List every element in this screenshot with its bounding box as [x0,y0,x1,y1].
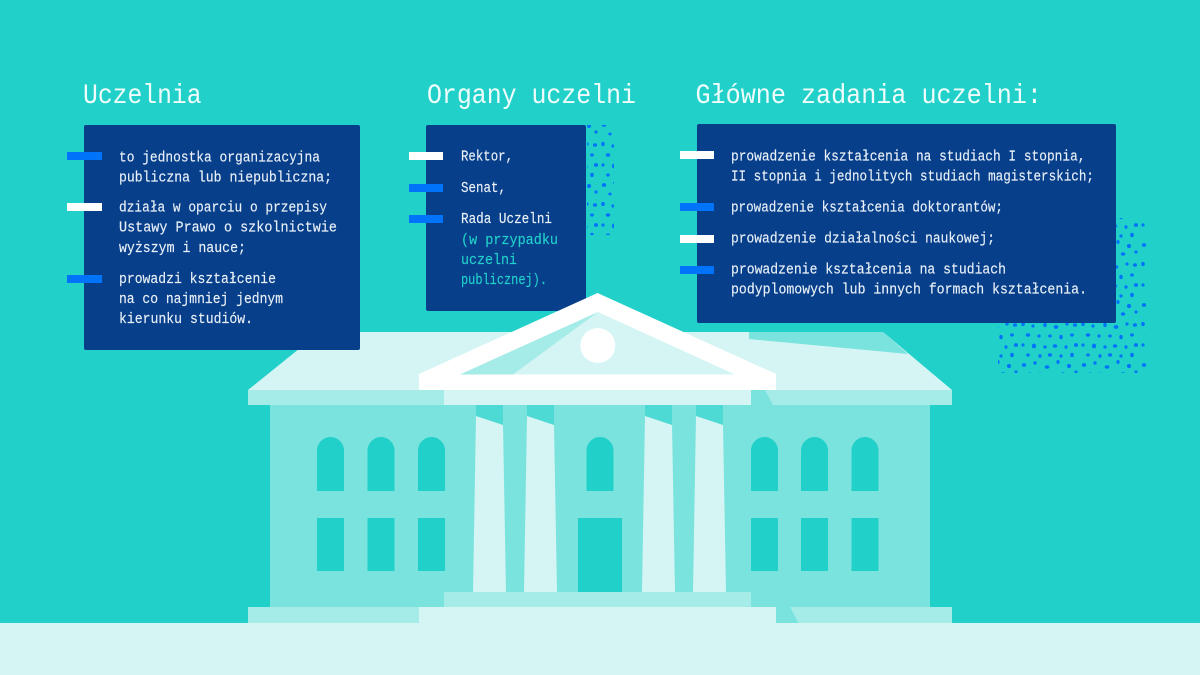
roof shadow [749,332,908,354]
steps [248,592,952,623]
building [248,332,952,623]
heading: Uczelnia: Uczelnia [83,81,202,112]
list text: Senat, [461,180,506,197]
list text [461,149,558,289]
panel: Organy uczelni [426,125,586,311]
list text: wyższym i nauce; [119,240,246,257]
pediment circle [580,328,615,363]
building walls [270,405,930,607]
roof [248,332,952,390]
list text: działa w oparciu o przepisy [119,200,327,217]
bullet markers [67,152,102,283]
panel: Uczelnia [84,125,360,350]
list text [731,148,1094,298]
list text: prowadzi kształcenie [119,271,276,288]
panel: Główne zadania uczelni [697,124,1116,323]
heading: Główne zadania uczelni: Główne zadania uczelni: [696,81,1042,112]
bullet markers [680,151,714,274]
column shadows [476,405,723,427]
column 3: Główne zadania uczelni [680,81,1116,323]
rectangular windows [317,518,878,571]
list text: publiczna lub niepubliczna; [119,170,332,186]
bullet markers [409,152,443,223]
list text: II stopnia i jednolitych studiach magisterskich; [731,168,1094,186]
pediment inner [460,312,735,374]
cornice [248,390,952,405]
list text: prowadzenie działalności naukowej; [731,230,995,248]
arched windows [317,437,878,491]
dot texture: right panel [998,218,1146,373]
list text: (w przypadku [461,232,558,249]
door [578,518,622,592]
columns [473,416,726,592]
dot texture: middle panel [587,125,614,235]
list text: Rektor, [461,149,513,166]
list text: na co najmniej jednym [119,291,283,308]
list text: publicznej). [461,272,547,289]
list text: Ustawy Prawo o szkolnictwie [119,220,337,237]
pediment shade [460,312,598,374]
list text [119,150,337,328]
list text: prowadzenie kształcenia doktorantów; [731,200,1003,216]
list text: Rada Uczelni [461,211,552,228]
column 1: Uczelnia [67,81,360,350]
heading: Organy uczelni: Organy uczelni [427,81,636,112]
pediment [419,293,776,390]
list text: kierunku studiów. [119,311,253,328]
list text: prowadzenie kształcenia na studiach I stopnia, [731,148,1086,166]
list text: podyplomowych lub innych formach kształcenia. [731,281,1087,298]
ground [0,623,1200,675]
column 2: Organy uczelni [409,81,636,311]
pediment frame [419,293,776,390]
list text: prowadzenie kształcenia na studiach [731,261,1006,278]
list text: to jednostka organizacyjna [119,150,320,166]
list text: uczelni [461,252,517,269]
